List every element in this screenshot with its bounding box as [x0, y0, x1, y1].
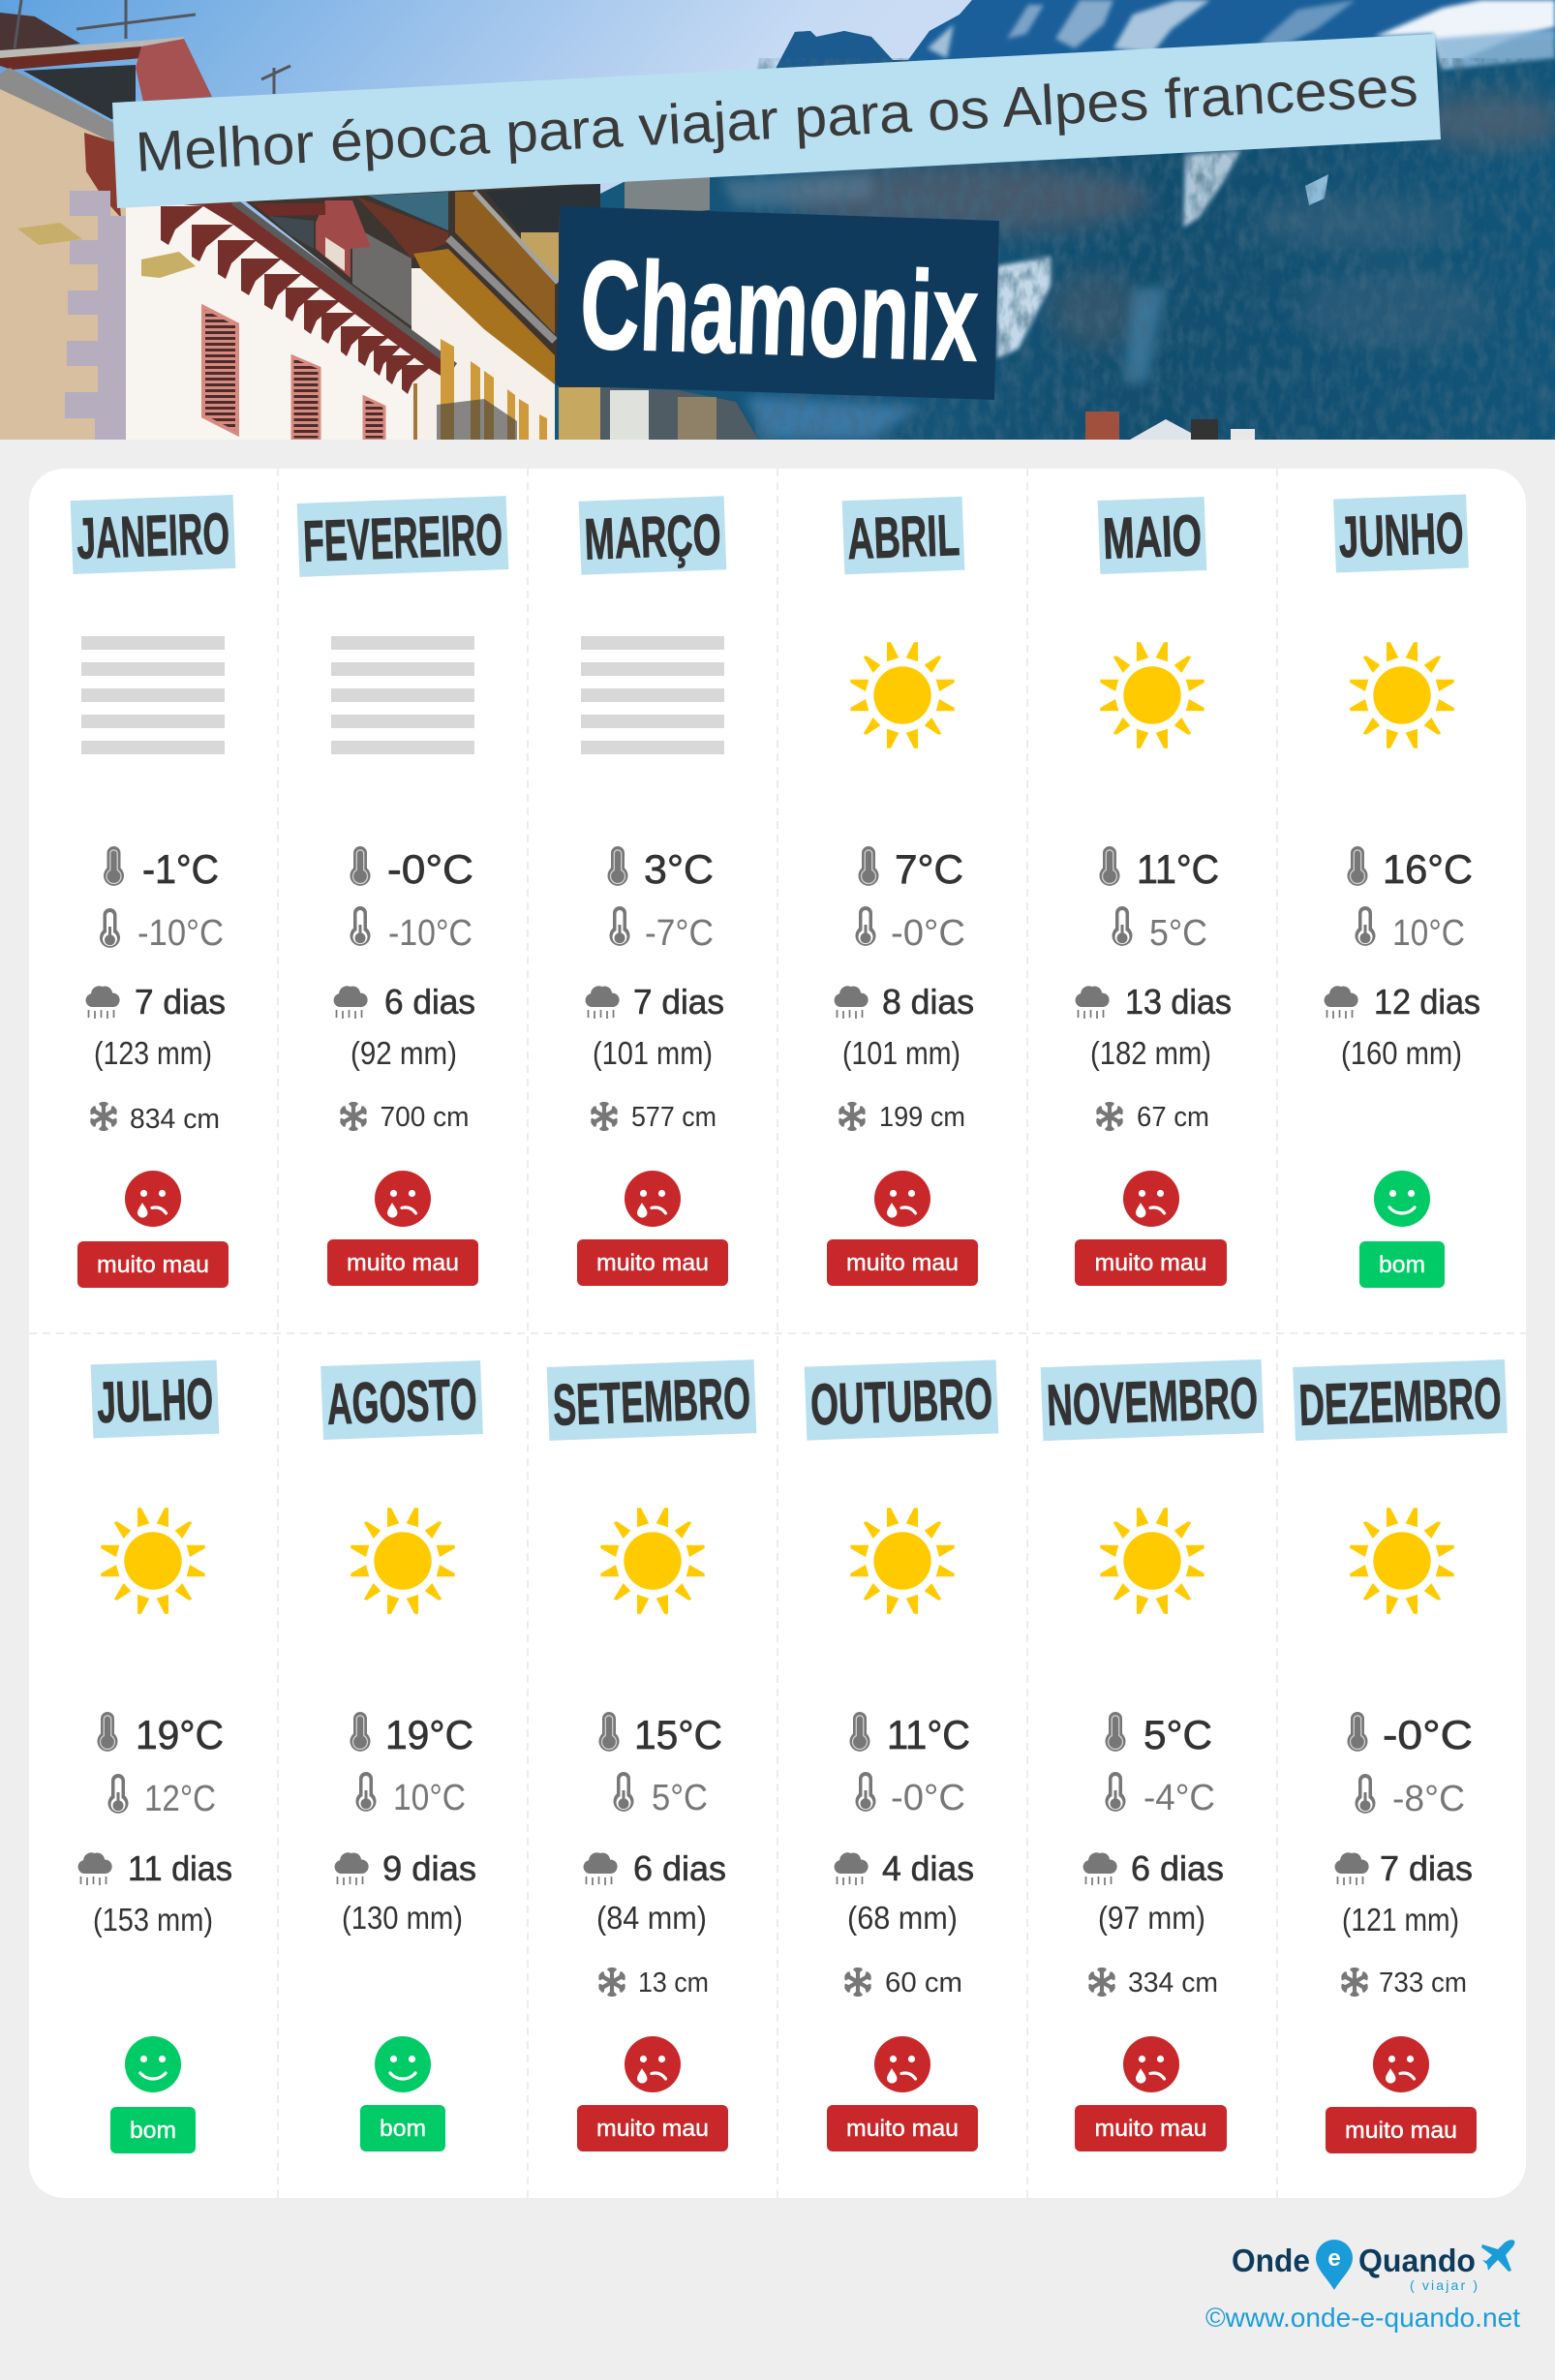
icon: sun	[1350, 642, 1454, 748]
icon: min temperature	[1356, 906, 1375, 946]
icon: sad face	[375, 1171, 431, 1227]
rain days: 12 dias	[1374, 982, 1480, 1022]
min temperature: 12°C	[144, 1779, 216, 1819]
month: Agosto	[320, 1360, 483, 2151]
icon: min temperature	[1356, 1774, 1375, 1814]
month label: NOVEMBRO	[1046, 1365, 1259, 1438]
min temperature: 5°C	[1149, 913, 1207, 954]
rating badge: muito mau	[846, 2116, 959, 2142]
month: Abril	[827, 497, 978, 1286]
month label: JANEIRO	[76, 501, 230, 571]
month label: JULHO	[96, 1366, 214, 1435]
rating badge: muito mau	[596, 2116, 709, 2142]
max temperature: 11°C	[1137, 846, 1219, 892]
icon: rain	[335, 1852, 369, 1885]
icon: snow	[1088, 1968, 1115, 1997]
rainfall: (182 mm)	[1090, 1035, 1211, 1071]
month label	[297, 496, 508, 577]
icon: min temperature	[351, 906, 370, 946]
month: Junho	[1325, 495, 1480, 1288]
month label	[805, 1359, 998, 1441]
rating badge: bom	[130, 2118, 176, 2144]
icon: sad face	[874, 2036, 930, 2092]
rating badge	[577, 2105, 728, 2151]
icon: max temperature	[104, 846, 124, 886]
icon: sun	[850, 1508, 955, 1614]
icon: rain	[1083, 1852, 1117, 1885]
icon: max temperature	[1106, 1712, 1125, 1752]
month: Maio	[1075, 497, 1232, 1286]
rainfall: (153 mm)	[93, 1902, 213, 1938]
icon: airplane	[1481, 2240, 1514, 2272]
icon: max temperature	[97, 1712, 118, 1752]
icon: sun	[1100, 1508, 1204, 1614]
icon: happy face	[1374, 1171, 1430, 1227]
icon: min temperature	[108, 1774, 128, 1814]
max temperature: 11°C	[887, 1712, 970, 1757]
max temperature: 5°C	[1143, 1712, 1212, 1757]
month label	[1333, 495, 1469, 572]
icon: sun	[351, 1508, 455, 1614]
buildings	[0, 13, 80, 53]
month label	[1098, 497, 1206, 574]
rating badge: muito mau	[97, 1252, 209, 1278]
min temperature: -10°C	[388, 913, 473, 954]
rainfall: (160 mm)	[1341, 1035, 1462, 1071]
icon: max temperature	[850, 1712, 869, 1752]
icon: min temperature	[856, 1772, 875, 1812]
icon: sad face	[625, 1171, 681, 1227]
rating badge: muito mau	[846, 1250, 959, 1276]
month label	[71, 495, 235, 574]
max temperature: 19°C	[136, 1712, 224, 1757]
rainfall: (84 mm)	[596, 1900, 707, 1936]
icon: rain	[86, 986, 120, 1019]
month: Dezembro	[1293, 1359, 1508, 2153]
rating badge: muito mau	[347, 1250, 459, 1276]
min temperature: -8°C	[1392, 1779, 1465, 1819]
month label	[320, 1360, 483, 1440]
rating badge	[327, 1239, 478, 1286]
rain days: 13 dias	[1125, 982, 1232, 1022]
icon: rain	[586, 986, 620, 1019]
month label	[842, 497, 964, 574]
rain days: 6 dias	[1131, 1848, 1224, 1888]
rain days: 6 dias	[384, 982, 475, 1022]
rating badge	[360, 2105, 445, 2151]
icon: rain	[1335, 1852, 1369, 1885]
max temperature: -1°C	[142, 846, 219, 892]
rain days: 6 dias	[633, 1848, 726, 1888]
rain days: 7 dias	[633, 982, 724, 1022]
min temperature: -7°C	[645, 913, 714, 954]
snowfall: 13 cm	[638, 1968, 709, 1999]
icon: rain	[1325, 986, 1358, 1019]
month label: JUNHO	[1337, 501, 1465, 569]
snowfall: 67 cm	[1137, 1102, 1209, 1133]
icon: min temperature	[1112, 906, 1133, 946]
rainfall: (123 mm)	[94, 1035, 212, 1071]
month label: MAIO	[1102, 503, 1203, 571]
icon: snow	[1096, 1102, 1123, 1131]
icon: rain	[835, 986, 869, 1019]
icon: sad face	[625, 2036, 681, 2092]
icon: rain	[78, 1852, 112, 1885]
icon: max temperature	[1348, 846, 1367, 886]
min temperature: 10°C	[1392, 913, 1465, 954]
rating badge: muito mau	[596, 1250, 709, 1276]
month: Novembro	[1041, 1359, 1264, 2151]
icon: snow	[838, 1102, 866, 1131]
icon: snow	[598, 1968, 625, 1997]
icon: min temperature	[856, 906, 875, 946]
rain days: 4 dias	[882, 1848, 974, 1888]
icon: snow	[591, 1102, 618, 1131]
icon: max temperature	[351, 846, 370, 886]
website credit: ©www.onde-e-quando.net	[1205, 2303, 1520, 2333]
icon: min temperature	[610, 906, 629, 946]
snowfall: 60 cm	[885, 1968, 962, 1999]
snowfall: 199 cm	[879, 1102, 965, 1133]
rain days: 8 dias	[882, 982, 974, 1022]
icon: max temperature	[608, 846, 627, 886]
icon: fog	[581, 636, 724, 754]
icon: snow	[341, 1102, 366, 1131]
month label: ABRIL	[846, 503, 960, 571]
rainfall: (92 mm)	[351, 1035, 457, 1071]
icon: happy face	[375, 2036, 431, 2092]
month label: FEVEREIRO	[302, 502, 503, 574]
rating badge: bom	[1379, 1252, 1425, 1278]
max temperature: -0°C	[1383, 1712, 1473, 1757]
snowfall: 834 cm	[130, 1104, 220, 1135]
month: Fevereiro	[297, 496, 508, 1286]
red eave and brackets	[161, 199, 455, 394]
icon: rain	[835, 1852, 869, 1885]
month label: MARÇO	[583, 502, 722, 572]
rain days: 9 dias	[382, 1848, 476, 1888]
icon: rain	[334, 986, 368, 1019]
rating badge	[1075, 2105, 1227, 2151]
logo: Onde e Quando: ( viajar )	[1410, 2277, 1478, 2293]
month: Março	[577, 496, 728, 1286]
icon: snow	[844, 1968, 871, 1997]
header photo: Chamonix buildings and mountains	[0, 0, 1555, 440]
month label	[579, 496, 726, 575]
month: Setembro	[547, 1359, 756, 2151]
max temperature: -0°C	[387, 846, 473, 892]
min temperature: 10°C	[393, 1778, 466, 1818]
max temperature: 3°C	[644, 846, 714, 892]
icon: min temperature	[1106, 1772, 1125, 1812]
rating badge: muito mau	[1345, 2118, 1457, 2144]
snowfall: 700 cm	[380, 1102, 469, 1133]
rating badge	[77, 1241, 229, 1288]
rainfall: (130 mm)	[342, 1900, 463, 1936]
rainfall: (68 mm)	[847, 1900, 958, 1936]
icon: snow	[91, 1102, 116, 1131]
icon: min temperature	[614, 1772, 633, 1812]
max temperature: 15°C	[634, 1712, 722, 1757]
month label: SETEMBRO	[552, 1365, 751, 1438]
logo: Onde e Quando: Onde	[1232, 2243, 1310, 2278]
rating badge	[110, 2107, 196, 2153]
rating badge: bom	[380, 2116, 426, 2142]
rating badge	[827, 1239, 978, 1286]
icon: snow	[1342, 1968, 1367, 1997]
max temperature: 7°C	[895, 846, 963, 892]
rainfall: (101 mm)	[842, 1035, 960, 1071]
icon: map pin	[1316, 2240, 1353, 2290]
rain days: 11 dias	[128, 1848, 232, 1888]
title text: Melhor época para viajar para os Alpes franceses	[134, 55, 1419, 184]
rating badge	[1075, 1239, 1227, 1286]
icon: max temperature	[351, 1712, 370, 1752]
rainfall: (121 mm)	[1342, 1902, 1459, 1938]
month: Janeiro	[71, 495, 235, 1288]
icon: sad face	[125, 1171, 181, 1227]
rainfall: (97 mm)	[1098, 1900, 1205, 1936]
city name: Chamonix	[578, 233, 981, 388]
rating badge	[827, 2105, 978, 2151]
month: Julho	[78, 1360, 232, 2153]
icon: fog	[81, 636, 225, 754]
max temperature: 16°C	[1383, 846, 1473, 892]
icon: min temperature	[356, 1772, 376, 1812]
icon: sun	[600, 1508, 705, 1614]
icon: sad face	[1373, 2036, 1429, 2092]
rating badge	[577, 1239, 728, 1286]
logo: Onde e Quando	[1232, 2240, 1514, 2293]
rating badge: muito mau	[1094, 2116, 1206, 2142]
city name box	[556, 206, 999, 400]
icon: max temperature	[598, 1712, 620, 1752]
icon: rain	[584, 1852, 618, 1885]
min temperature: -4°C	[1143, 1778, 1215, 1818]
rainfall: (101 mm)	[593, 1035, 713, 1071]
icon: sad face	[874, 1171, 930, 1227]
month label: OUTUBRO	[809, 1366, 993, 1437]
icon: map pin: e	[1327, 2245, 1341, 2272]
month label	[547, 1359, 756, 1441]
min temperature: 5°C	[652, 1778, 708, 1818]
icon: sun	[850, 642, 955, 748]
icon: sad face	[1123, 2036, 1179, 2092]
panel: monthly calendar	[29, 469, 1526, 2198]
month: Outubro	[805, 1359, 998, 2151]
rating badge	[1359, 1241, 1445, 1288]
icon: sad face	[1123, 1171, 1179, 1227]
snowfall: 577 cm	[631, 1102, 717, 1133]
snowfall: 334 cm	[1128, 1968, 1218, 1999]
logo: Onde e Quando: Quando	[1358, 2243, 1476, 2278]
icon: rain	[1076, 986, 1110, 1019]
month label: AGOSTO	[325, 1366, 478, 1437]
min temperature: -10°C	[137, 913, 224, 954]
max temperature: 19°C	[385, 1712, 473, 1757]
min temperature: -0°C	[891, 1778, 965, 1818]
icon: max temperature	[1348, 1712, 1367, 1752]
icon: fog	[331, 636, 474, 754]
icon: sun	[1100, 642, 1204, 748]
title banner	[112, 34, 1441, 208]
rating badge	[1326, 2107, 1477, 2153]
rain days: 7 dias	[135, 982, 226, 1022]
snowfall: 733 cm	[1379, 1968, 1467, 1999]
icon: min temperature	[100, 908, 120, 948]
min temperature: -0°C	[891, 913, 965, 954]
icon: max temperature	[1100, 846, 1119, 886]
rating badge: muito mau	[1094, 1250, 1206, 1276]
month label	[91, 1360, 219, 1438]
month label	[1041, 1359, 1264, 1441]
icon: happy face	[125, 2036, 181, 2092]
rain days: 7 dias	[1380, 1848, 1473, 1888]
icon: sun	[101, 1508, 205, 1614]
icon: sun	[1350, 1508, 1454, 1614]
icon: max temperature	[858, 846, 879, 886]
